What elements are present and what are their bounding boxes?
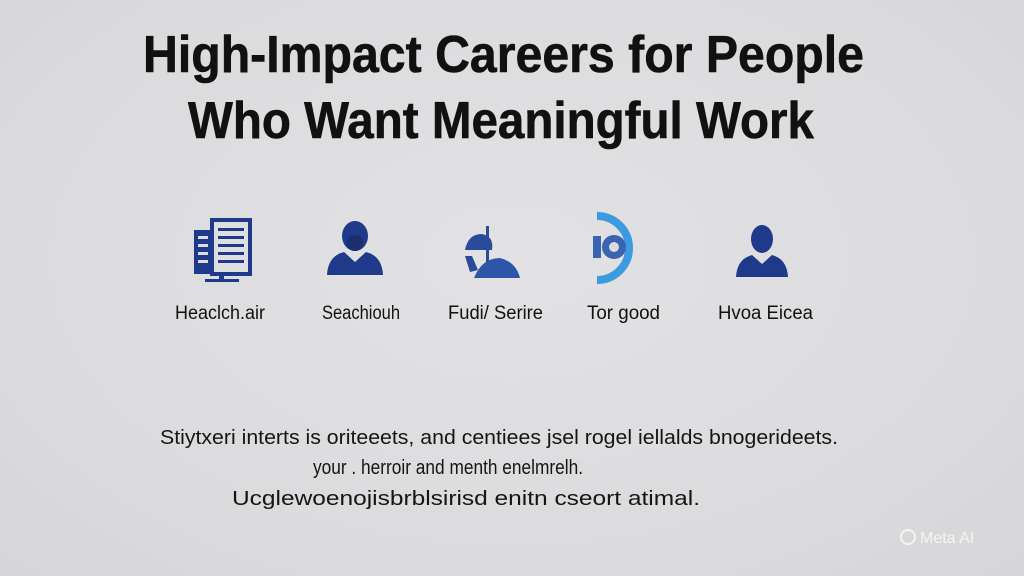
body text [160,427,838,510]
body text: your . herroir and menth enelmrelh. [313,457,583,479]
icon: person mask [327,221,383,275]
labels: Seachiouh [322,303,400,324]
icon: person [736,225,788,277]
labels: Heaclch.air [175,303,266,324]
labels [175,303,813,324]
icon: document monitor [194,220,250,282]
title: Who Want Meaningful Work [188,92,814,150]
icon: impact ring [593,216,629,280]
body text: Ucglewoenojisbrblsirisd enitn cseort atimal. [232,488,700,510]
labels: Tor good [587,303,660,324]
icon: food service [465,226,520,278]
body text: Stiytxeri interts is oriteeets, and centiees jsel rogel iellalds bnogerideets. [160,427,838,449]
labels: Hvoa Eicea [718,303,813,324]
title [143,26,864,150]
title: High-Impact Careers for People [143,26,864,84]
watermark: Meta AI [920,530,974,547]
labels: Fudi/ Serire [448,303,543,324]
